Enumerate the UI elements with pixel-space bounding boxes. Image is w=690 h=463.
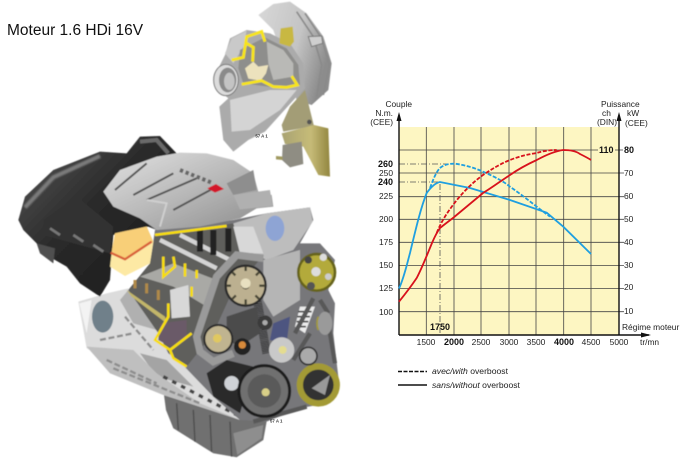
spring: [295, 307, 315, 333]
yellow oil channels: [155, 226, 227, 367]
actuator body: [282, 142, 303, 167]
oil sump: [164, 395, 267, 457]
power curve with overboost: [437, 150, 557, 233]
part code: 57 A 1: [255, 133, 268, 138]
power curve without overboost: [399, 150, 591, 302]
x axis labels: 1750: [430, 322, 450, 332]
tensioner: [234, 338, 251, 355]
cutaway interior: [238, 37, 300, 87]
left axis labels: Couple: [385, 99, 412, 109]
left axis labels: 260: [378, 159, 393, 169]
right axis labels: (CEE): [625, 118, 648, 128]
left axis labels: 250: [379, 168, 393, 178]
title: Moteur 1.6 HDi 16V: [7, 22, 143, 39]
turbo on engine: [233, 207, 313, 260]
silver engine cover: [103, 153, 273, 230]
accessory belt: [253, 298, 335, 422]
left axis labels: 125: [379, 283, 393, 293]
x axis labels: 3500: [527, 337, 546, 347]
red badge: [207, 184, 224, 193]
part code: 57 A 1: [270, 418, 283, 423]
exhaust inlet opening: [214, 64, 238, 96]
wastegate cover: [282, 125, 330, 177]
axes: [399, 118, 649, 335]
x axis labels: 2000: [444, 337, 464, 347]
timing belt cover: [197, 255, 263, 362]
turbine housing: [215, 30, 305, 152]
right axis labels: [597, 99, 648, 316]
torque curve without overboost: [399, 182, 591, 288]
compressor housing: [258, 2, 332, 105]
x axis labels: 4000: [554, 337, 574, 347]
small idler: [318, 312, 332, 335]
right axis labels: (DIN): [597, 117, 617, 127]
right axis labels: Puissance: [601, 99, 640, 109]
right axis labels: 80: [624, 145, 634, 155]
right axis labels: 110: [599, 145, 614, 155]
left axis labels: 100: [379, 307, 393, 317]
right axis labels: 50: [624, 214, 634, 224]
torque and power chart: [370, 99, 679, 390]
left axis labels: 240: [378, 177, 393, 187]
left axis labels: [370, 99, 412, 317]
x axis labels: 1500: [417, 337, 436, 347]
left axis labels: N.m.: [375, 108, 393, 118]
left axis labels: (CEE): [370, 117, 393, 127]
piston: [170, 285, 190, 318]
right axis labels: 10: [624, 306, 634, 316]
left axis labels: 150: [379, 260, 393, 270]
engine block white casting: [78, 288, 240, 420]
air filter box and intake: [18, 136, 177, 297]
water pump pulley: [298, 254, 335, 291]
right axis labels: 70: [624, 168, 634, 178]
ac compressor pulley: [297, 363, 340, 407]
dark pulley region: [207, 360, 253, 413]
engine illustration: [18, 136, 340, 457]
grid: [399, 127, 624, 335]
right axis labels: 40: [624, 237, 634, 247]
x axis labels: [417, 322, 679, 347]
right axis labels: kW: [627, 108, 639, 118]
legend: [398, 366, 521, 390]
legend: avec/with overboost: [432, 366, 509, 376]
left axis labels: 225: [379, 191, 393, 201]
right axis labels: 60: [624, 191, 634, 201]
x axis labels: Régime moteur: [622, 322, 679, 332]
turbine wheel: [245, 62, 268, 81]
oil filter: [92, 301, 113, 333]
small pulley: [300, 347, 317, 365]
right axis labels: ch: [602, 108, 611, 118]
yellow exhaust channels: [232, 32, 297, 87]
injector rail: [127, 290, 167, 323]
x axis labels: tr/mn: [640, 337, 659, 347]
legend: sans/without overboost: [432, 380, 521, 390]
actuator pipe: [279, 27, 294, 47]
x axis labels: 4500: [582, 337, 601, 347]
turbocharger illustration: [214, 2, 332, 177]
wastegate column: [282, 90, 314, 132]
central engine base: [128, 207, 338, 422]
cylinder head cutaway: [128, 223, 263, 367]
right axis labels: 20: [624, 282, 634, 292]
torque curve with overboost: [430, 164, 550, 217]
crank sprocket: [204, 325, 232, 353]
right axis labels: 30: [624, 260, 634, 270]
crankshaft pulley: [239, 366, 290, 416]
filter cutaway: [110, 227, 153, 276]
left axis labels: 200: [379, 214, 393, 224]
x axis labels: 5000: [610, 337, 629, 347]
left axis labels: 175: [379, 237, 393, 247]
right side housing: [263, 250, 300, 317]
camshaft sprocket: [226, 266, 266, 306]
idler pulley: [258, 315, 272, 330]
plot background: [399, 127, 619, 335]
x axis labels: 3000: [500, 337, 519, 347]
x axis labels: 2500: [472, 337, 491, 347]
